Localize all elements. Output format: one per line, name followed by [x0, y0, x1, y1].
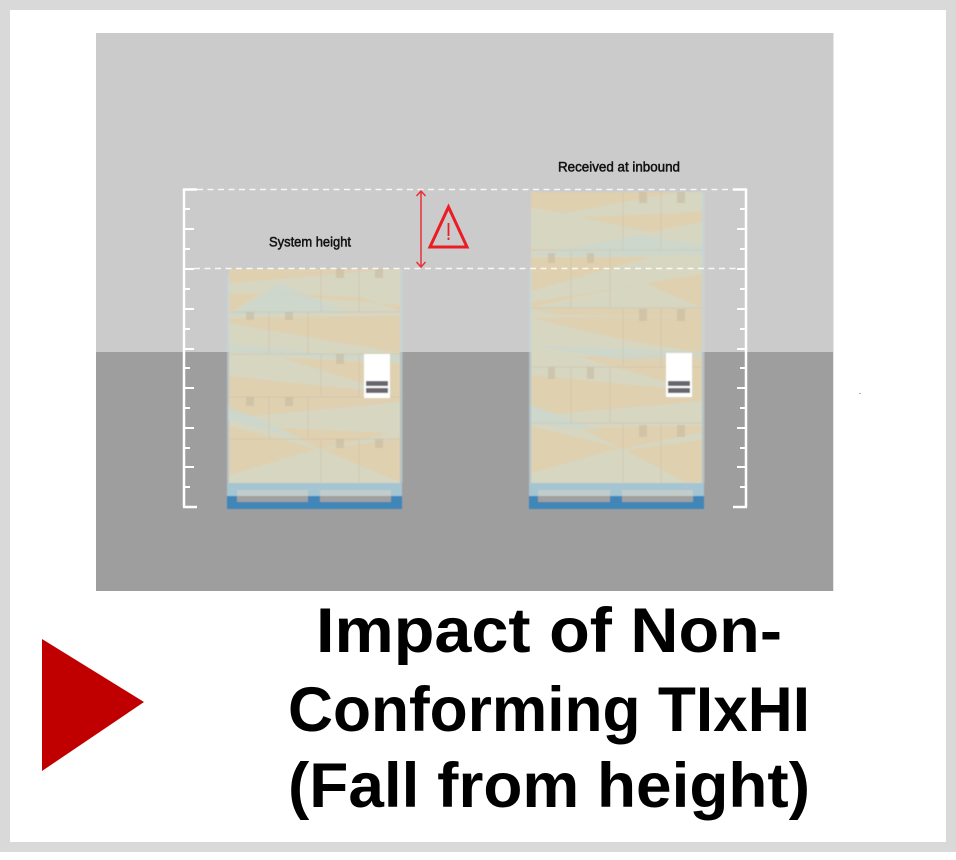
arrow: height difference	[416, 191, 426, 267]
warehouse scene panel	[96, 33, 834, 591]
right height scale	[733, 189, 747, 507]
pallet base	[227, 483, 402, 509]
title: Impact of Non-	[316, 596, 782, 666]
left pallet: system height	[227, 269, 402, 509]
dashed height lines	[194, 190, 737, 268]
icon: red play triangle	[42, 639, 144, 771]
stray dot	[859, 393, 861, 394]
left height scale	[183, 189, 197, 507]
right pallet: received at inbound	[529, 192, 704, 509]
icon: warning triangle	[430, 207, 467, 247]
shipping label	[364, 354, 390, 398]
label: received at inbound: Received at inbound	[558, 158, 680, 174]
shipping label	[666, 353, 692, 397]
title: Conforming TIxHI	[288, 675, 810, 745]
pallet base	[529, 483, 704, 509]
title: (Fall from height)	[288, 751, 810, 821]
label: system height: System height	[269, 234, 351, 250]
title	[288, 596, 810, 821]
